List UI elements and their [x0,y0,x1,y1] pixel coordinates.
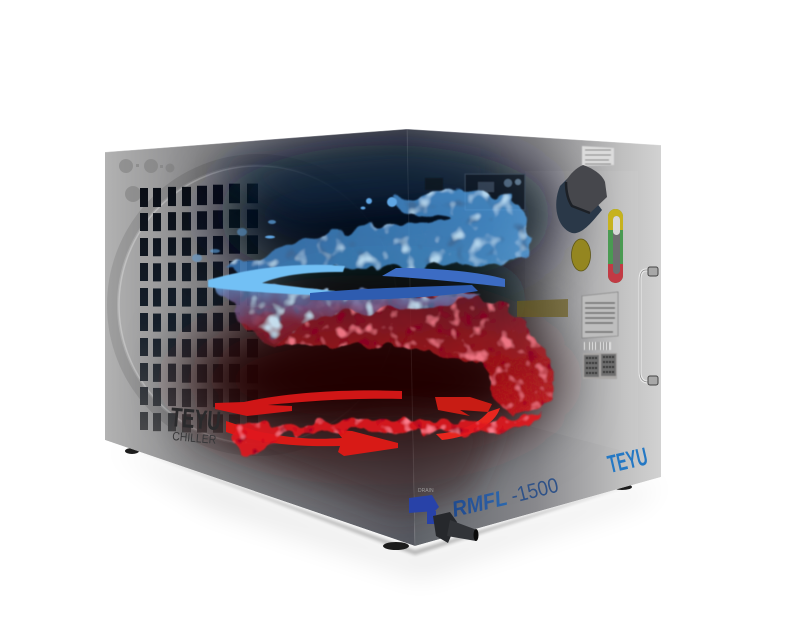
dark red interior glow [185,308,555,452]
model name [450,474,561,522]
right face [407,129,661,546]
floor shadow [110,445,660,575]
right red arrow [435,397,492,416]
left brand mark [169,402,222,447]
model name: RMFL [450,485,510,522]
blue droplets [192,197,397,262]
barcode [584,342,611,350]
chiller cabinet [105,129,661,546]
level gauge [608,209,623,283]
blue water, upper slab [226,193,530,278]
rear display panel [425,174,525,210]
dark core [245,245,535,355]
QR codes [583,353,617,379]
hose nozzle [433,512,478,543]
hot lower swirl arrows [215,390,500,456]
dark blue interior glow [215,145,555,285]
specification plate [582,292,618,338]
blue water, lower bowl [214,283,480,344]
chiller infographic [105,129,661,576]
left brand mark: CHILLER [172,429,217,447]
top edge highlight [105,129,661,152]
water tank cap [556,165,607,233]
red water, rising stream [235,293,556,414]
TEYU logo: TEYU [605,443,650,479]
right inner panel [525,171,638,455]
left face [105,129,415,546]
vertical ridge [407,129,415,546]
dark blue bars [382,268,505,287]
lower red arrow [226,421,398,456]
cold blue swirl arrows [208,265,505,300]
yellow warning oval [572,239,590,271]
drain valve [409,488,439,524]
spec label top [582,146,614,166]
model name: -1500 [509,474,561,508]
side handle [640,267,658,385]
yellow warning strip [517,299,568,317]
red water, lower band [232,414,540,456]
upper left red arrow [215,390,402,416]
light blue arc [208,265,345,296]
upper haze [215,148,490,215]
left brand mark: TEYU [169,402,222,436]
feet [125,448,632,550]
control knobs [119,159,174,202]
lower haze [175,410,500,515]
drain valve: DRAIN [418,488,434,494]
ventilation grid [140,184,258,434]
fan ring [107,154,306,454]
